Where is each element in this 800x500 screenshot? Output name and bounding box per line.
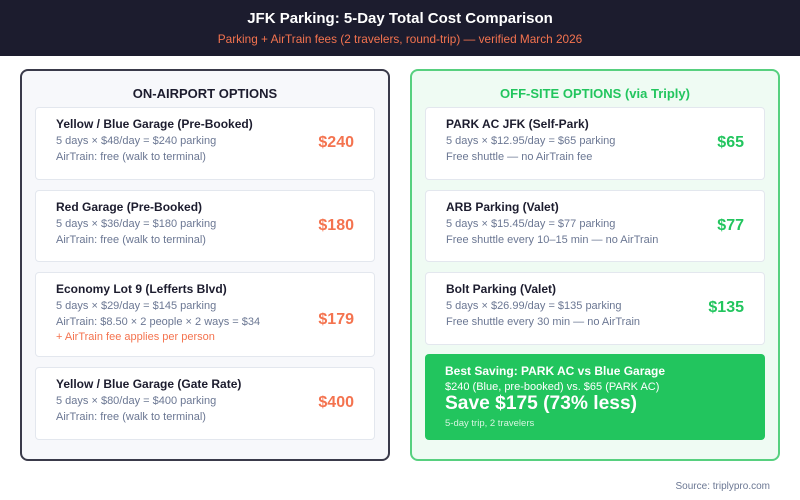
card: red garage: [35, 190, 375, 262]
panel: on-airport: [20, 69, 390, 461]
card: gate rate: AirTrain: free (walk to terminal): [56, 411, 206, 423]
card: yellow blue garage: AirTrain: free (walk to terminal): [56, 151, 206, 163]
card: gate rate: $400: [318, 394, 354, 411]
card: red garage: $180: [318, 217, 354, 234]
header: Parking + AirTrain fees (2 travelers, round-trip) — verified March 2026: [218, 32, 582, 46]
header: [0, 0, 800, 56]
card: bolt: 5 days × $26.99/day = $135 parking: [446, 300, 622, 312]
card: yellow blue garage: Yellow / Blue Garage (Pre-Booked): [56, 117, 253, 131]
card: bolt: [425, 272, 765, 345]
callout: best saving: [425, 354, 765, 440]
heading: off-site: OFF-SITE OPTIONS (via Triply): [500, 86, 690, 101]
card: gate rate: Yellow / Blue Garage (Gate Rate): [56, 377, 241, 391]
card: bolt: Free shuttle every 30 min — no AirTrain: [446, 316, 640, 328]
card: economy lot 9: 5 days × $29/day = $145 parking: [56, 300, 216, 312]
card: economy lot 9: Economy Lot 9 (Lefferts Blvd): [56, 282, 227, 296]
card: arb: Free shuttle every 10–15 min — no AirTrain: [446, 234, 658, 246]
card: red garage: AirTrain: free (walk to terminal): [56, 234, 206, 246]
card: bolt: $135: [708, 299, 744, 316]
card: economy lot 9: $179: [318, 311, 354, 328]
card: park ac: [425, 107, 765, 180]
card: economy lot 9: AirTrain: $8.50 × 2 people × 2 ways = $34: [56, 316, 260, 328]
callout: best saving: Save $175 (73% less): [445, 393, 637, 414]
header: JFK Parking: 5-Day Total Cost Comparison: [247, 10, 553, 27]
callout: best saving: $240 (Blue, pre-booked) vs. $65 (PARK AC): [445, 381, 659, 393]
card: yellow blue garage: $240: [318, 134, 354, 151]
callout: best saving: Best Saving: PARK AC vs Blue Garage: [445, 364, 665, 378]
card: bolt: Bolt Parking (Valet): [446, 282, 556, 296]
card: arb: $77: [717, 217, 744, 234]
card: arb: [425, 190, 765, 262]
card: red garage: 5 days × $36/day = $180 parking: [56, 218, 216, 230]
card: yellow blue garage: 5 days × $48/day = $240 parking: [56, 135, 216, 147]
heading: on-airport: ON-AIRPORT OPTIONS: [133, 86, 277, 101]
card: economy lot 9: [35, 272, 375, 357]
card: arb: 5 days × $15.45/day = $77 parking: [446, 218, 615, 230]
card: red garage: Red Garage (Pre-Booked): [56, 200, 202, 214]
card: arb: ARB Parking (Valet): [446, 200, 559, 214]
card: yellow blue garage: [35, 107, 375, 180]
card: park ac: PARK AC JFK (Self-Park): [446, 117, 589, 131]
callout: best saving: 5-day trip, 2 travelers: [445, 418, 534, 429]
card: park ac: $65: [717, 134, 744, 151]
panel: off-site: [410, 69, 780, 461]
card: gate rate: [35, 367, 375, 440]
source: Source: triplypro.com: [676, 481, 770, 492]
card: park ac: 5 days × $12.95/day = $65 parking: [446, 135, 615, 147]
card: gate rate: 5 days × $80/day = $400 parking: [56, 395, 216, 407]
card: park ac: Free shuttle — no AirTrain fee: [446, 151, 592, 163]
card: economy lot 9: + AirTrain fee applies per person: [56, 331, 215, 343]
